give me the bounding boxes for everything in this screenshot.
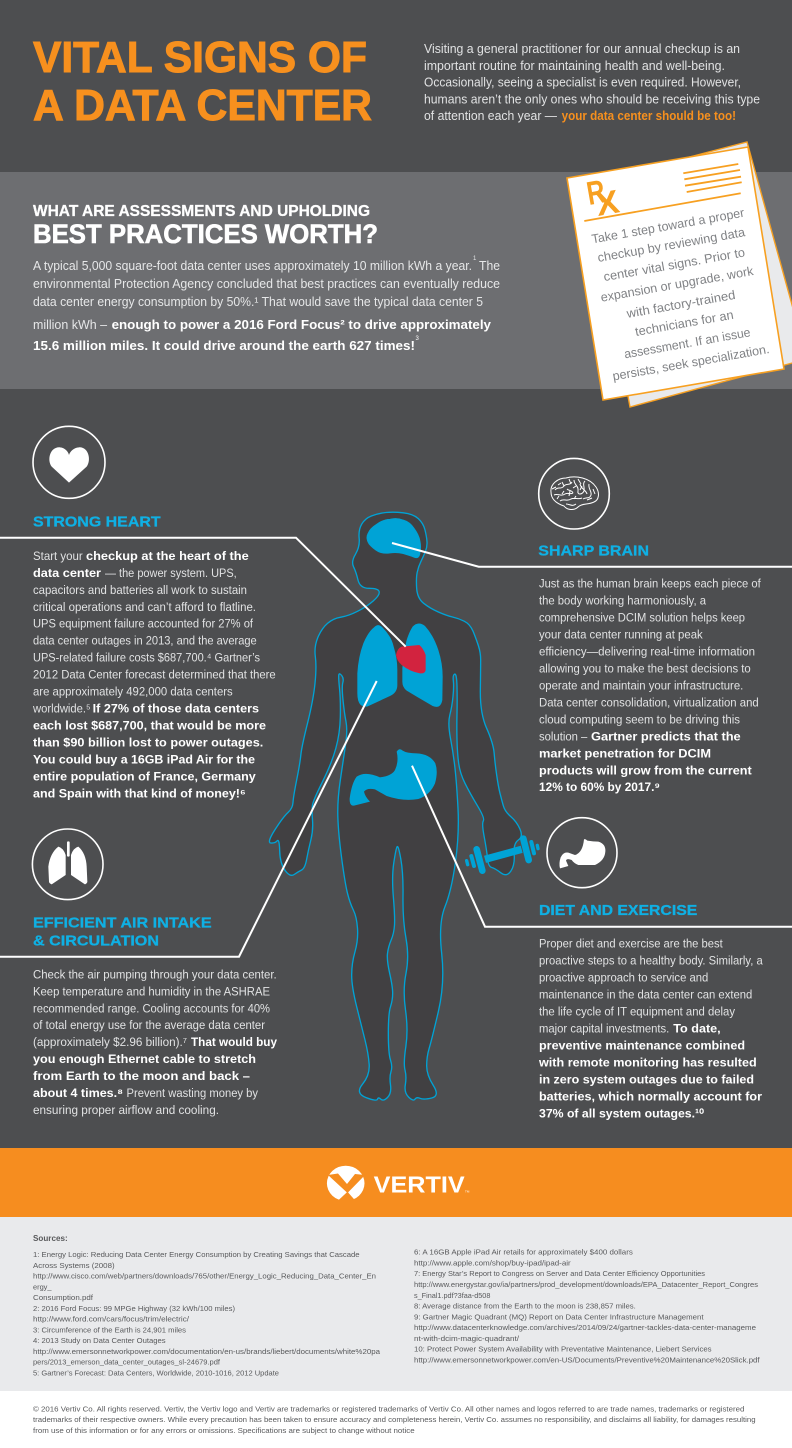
icon: Rx symbol: R: [584, 172, 608, 212]
heading: WHAT ARE ASSESSMENTS AND UPHOLDING: [33, 203, 370, 220]
sources left column: 5: Gartner’s Forecast: Data Centers, Worldwide, 2010-1016, 2012 Update: [33, 1368, 279, 1378]
text: sharp brain: market penetration for DCIM: [539, 746, 711, 760]
text: prescription note: center vital signs. Prior to: [603, 245, 746, 284]
sources right column: 7: Energy Star’s Report to Congress on Server and Data Center Efficiency Opportunities: [414, 1269, 705, 1278]
text: prescription note: technicians for an: [634, 308, 735, 339]
panel: orange logo band: [0, 1148, 792, 1217]
arrow: heart callout line: [0, 538, 406, 647]
arrow: lungs callout line: [0, 681, 377, 957]
sources left column: pers/2013_emerson_data_center_outages_sl-24679.pdf: [33, 1358, 221, 1367]
best practices paragraph: million kWh –: [33, 318, 107, 332]
text: prescription note: assessment. If an issue: [623, 325, 752, 361]
sources right column: 10: Protect Power System Availability with Preventative Maintenance, Liebert Services: [414, 1345, 712, 1354]
title: VITAL SIGNS OF: [33, 33, 367, 82]
icon: Rx symbol: X: [593, 182, 622, 223]
text: diet and exercise: proactive steps to a healthy body. Similarly, a: [539, 954, 763, 968]
heading: sharp brain: SHARP BRAIN: [538, 543, 649, 560]
heading: strong heart: STRONG HEART: [33, 514, 161, 531]
sources left column: http://www.emersonnetworkpower.com/documentation/en-us/brands/liebert/documents/white%20pa: [33, 1347, 381, 1356]
organ: lungs: [357, 623, 443, 707]
sources right column: 6: A 16GB Apple iPad Air retails for approximately $400 dollars: [414, 1248, 633, 1257]
best practices paragraph: enough to power a 2016 Ford Focus² to drive approximately: [112, 317, 492, 332]
text: sharp brain: products will grow from the current: [539, 763, 752, 777]
best practices paragraph: data center energy consumption by 50%.¹ That would save the typical data center 5: [33, 295, 483, 309]
text: sharp brain: efficiency—delivering real-time information: [539, 644, 755, 658]
sources right column: 9: Gartner Magic Quadrant (MQ) Report on Data Center Infrastructure Management: [414, 1312, 704, 1321]
sources right column: nt-with-dcim-magic-quadrant/: [414, 1334, 520, 1343]
heading: efficient air intake and circulation: & CIRCULATION: [33, 933, 159, 950]
text: diet and exercise: maintenance in the data center can extend: [539, 988, 752, 1002]
sources left column: 2: 2016 Ford Focus: 99 MPGe Highway (32 kWh/100 miles): [33, 1304, 235, 1313]
heading: efficient air intake and circulation: EFFICIENT AIR INTAKE: [33, 914, 212, 931]
text: strong heart: are approximately 492,000 data centers: [33, 685, 233, 699]
text: strong heart: — the power system. UPS,: [105, 566, 237, 580]
intro text: Occasionally, seeing a specialist is even required. However,: [424, 76, 741, 90]
intro text: Visiting a general practitioner for our annual checkup is an: [424, 42, 740, 56]
sources left column: Consumption.pdf: [33, 1293, 94, 1302]
heading: efficient air intake and circulation: [33, 914, 212, 950]
text: sharp brain: comprehensive DCIM solution helps keep: [539, 611, 745, 625]
text: air intake: you enough Ethernet cable to stretch: [33, 1052, 256, 1066]
panel: header: [0, 0, 792, 172]
text: sharp brain: 12% to 60% by 2017.⁹: [539, 780, 660, 794]
heading: BEST PRACTICES WORTH?: [33, 219, 378, 249]
text: strong heart: data center outages in 2013, and the average: [33, 634, 257, 648]
heading: sources: Sources:: [33, 1234, 68, 1243]
text: air intake: Keep temperature and humidity in the ASHRAE: [33, 984, 270, 998]
text: strong heart: and Spain with that kind of money!⁶: [33, 786, 246, 800]
sources right column: http://www.emersonnetworkpower.com/en-US/Documents/Preventive%20Maintenance%20Slick.pdf: [414, 1355, 761, 1364]
text: air intake: Prevent wasting money by: [126, 1086, 259, 1100]
text: strong heart: [32, 549, 276, 800]
text: prescription note: expansion or upgrade, work: [600, 264, 755, 305]
sources left column: Across Systems (2008): [33, 1261, 115, 1270]
text: prescription note: persists, seek specialization.: [611, 342, 771, 383]
panel: copyright: [0, 1391, 792, 1448]
text: strong heart: capacitors and batteries all work to sustain: [33, 583, 247, 597]
best practices paragraph: environmental Protection Agency concluded that best practices can eventually reduce: [33, 277, 500, 291]
text: strong heart: critical operations and can’t afford to flatline.: [33, 600, 256, 614]
best practices paragraph: 15.6 million miles. It could drive around the earth 627 times!: [33, 338, 415, 353]
text: diet and exercise: with remote monitoring has resulted: [538, 1056, 757, 1070]
intro text: important routine for maintaining health and well-being.: [424, 59, 725, 73]
prescription lines: [584, 164, 742, 221]
arrow: stomach callout line: [412, 766, 792, 927]
text: sharp brain: Gartner predicts that the: [591, 730, 741, 744]
text: air intake: (approximately $2.96 billion).⁷: [33, 1035, 187, 1049]
text: prescription note: checkup by reviewing data: [597, 225, 746, 265]
best practices paragraph: The: [479, 259, 500, 273]
intro text: [424, 42, 760, 123]
icon: heart: [33, 426, 105, 498]
copyright text: from use of this information or for any errors or omissions. Specifications are subject to change without notice: [33, 1426, 415, 1435]
sources left column: ergy_: [33, 1282, 52, 1291]
copyright text: © 2016 Vertiv Co. All rights reserved. Vertiv, the Vertiv logo and Vertiv are trademarks or registered trademarks of Vertiv Co. All other names and logos referred to are trade names, trademarks or registered: [33, 1404, 744, 1413]
text: diet and exercise: in zero system outages due to failed: [539, 1072, 754, 1086]
icon: stomach: [547, 818, 617, 888]
text: air intake: That would buy: [191, 1035, 277, 1049]
text: sharp brain: operate and maintain your infrastructure.: [539, 678, 743, 692]
sources left column: [33, 1250, 381, 1378]
logo: Vertiv: [327, 1166, 470, 1202]
text: strong heart: each lost $687,700, that would be more: [33, 719, 266, 733]
logo: Vertiv: VERTIV: [374, 1172, 465, 1198]
best practices paragraph: 3: [416, 336, 420, 342]
copyright text: trademarks of their respective owners. While every precaution has been taken to ensure accuracy and completeness herein, Vertiv Co. assumes no responsibility, and disclaims all liability, for damages resulting: [33, 1415, 756, 1424]
icon: dumbbell: [467, 839, 538, 871]
icon: Rx symbol: [584, 172, 622, 223]
logo: Vertiv: TM: [465, 1190, 470, 1194]
text: sharp brain: your data center running at peak: [539, 628, 704, 642]
text: diet and exercise: batteries, which normally account for: [539, 1090, 762, 1104]
sources right column: http://www.apple.com/shop/buy-ipad/ipad-air: [414, 1258, 571, 1268]
text: diet and exercise: proactive approach to service and: [539, 971, 708, 985]
text: strong heart: data center: [33, 566, 101, 580]
sources left column: 1: Energy Logic: Reducing Data Center Energy Consumption by Creating Savings that Cascade: [33, 1250, 360, 1259]
text: sharp brain: allowing you to make the best decisions to: [539, 662, 751, 676]
text: sharp brain: the body working harmoniously, a: [539, 594, 706, 608]
text: sharp brain: Data center consolidation, virtualization and: [539, 696, 759, 710]
sources right column: [414, 1248, 761, 1364]
text: diet and exercise: Proper diet and exercise are the best: [539, 937, 723, 951]
organ: brain: [367, 518, 421, 558]
sources right column: 8: Average distance from the Earth to the moon is 238,857 miles.: [414, 1302, 636, 1310]
text: sharp brain: cloud computing seem to be driving this: [539, 712, 740, 726]
sources right column: http://www.energystar.gov/ia/partners/prod_development/downloads/EPA_Datacenter_Report_Congres: [414, 1280, 758, 1289]
text: strong heart: UPS-related failure costs $687,700.⁴ Gartner’s: [33, 651, 260, 665]
panel: vital signs: [0, 389, 792, 1148]
intro text: humans aren’t the only ones who should be receiving this type: [424, 92, 760, 106]
text: diet and exercise: [538, 937, 763, 1120]
text: diet and exercise: preventive maintenance combined: [539, 1038, 745, 1052]
text: strong heart: than $90 billion lost to power outages.: [33, 736, 263, 750]
text: strong heart: Start your: [33, 549, 83, 563]
best practices paragraph: A typical 5,000 square-foot data center uses approximately 10 million kWh a year.: [33, 259, 472, 273]
text: air intake: of total energy use for the average data center: [33, 1018, 265, 1032]
text: air intake: about 4 times.⁸: [33, 1086, 123, 1100]
text: air intake: from Earth to the moon and back –: [33, 1069, 250, 1083]
text: diet and exercise: major capital investments.: [539, 1022, 669, 1036]
text: prescription note: [591, 206, 771, 383]
text: air intake: recommended range. Cooling accounts for 40%: [33, 1002, 270, 1016]
sources left column: http://www.cisco.com/web/partners/downloads/765/other/Energy_Logic_Reducing_Data_Center_En: [33, 1272, 376, 1280]
sources left column: 4: 2013 Study on Data Center Outages: [33, 1336, 166, 1345]
text: sharp brain: solution –: [539, 730, 588, 744]
intro text: of attention each year —: [424, 109, 557, 123]
text: strong heart: entire population of France, Germany: [33, 769, 256, 783]
text: diet and exercise: 37% of all system outages.¹⁰: [539, 1106, 704, 1120]
sources left column: http://www.ford.com/cars/focus/trim/electric/: [33, 1315, 190, 1324]
intro text: your data center should be too!: [562, 109, 736, 123]
text: air intake: ensuring proper airflow and cooling.: [33, 1103, 219, 1117]
text: sharp brain: Just as the human brain keeps each piece of: [539, 577, 761, 591]
arrow: brain callout line: [392, 543, 792, 567]
text: air intake: Check the air pumping through your data center.: [33, 968, 277, 982]
heading: [33, 203, 378, 249]
title: A DATA CENTER: [33, 81, 372, 130]
best practices paragraph: [33, 256, 500, 353]
best practices paragraph: 1: [473, 256, 477, 262]
text: strong heart: UPS equipment failure accounted for 27% of: [33, 617, 254, 631]
text: strong heart: 2012 Data Center forecast determined that there: [33, 668, 276, 682]
sources left column: 3: Circumference of the Earth is 24,901 miles: [33, 1325, 186, 1334]
text: diet and exercise: To date,: [673, 1022, 721, 1036]
text: strong heart: You could buy a 16GB iPad Air for the: [33, 752, 255, 766]
text: strong heart: If 27% of those data centers: [93, 702, 259, 716]
organ: stomach: [350, 749, 437, 806]
text: strong heart: checkup at the heart of the: [86, 549, 249, 563]
text: air intake: [33, 968, 277, 1117]
text: prescription note: with factory-trained: [625, 288, 736, 321]
text: sharp brain: [539, 577, 761, 794]
sources right column: http://www.datacenterknowledge.com/archives/2014/09/24/gartner-tackles-data-center-manageme: [414, 1323, 756, 1332]
panel: Rx prescription note: [567, 142, 792, 407]
icon: brain: [539, 458, 609, 529]
sources right column: s_Final1.pdf?3faa-d508: [414, 1291, 490, 1300]
text: diet and exercise: the life cycle of IT equipment and delay: [539, 1005, 736, 1019]
human body figure: [269, 512, 538, 1100]
text: strong heart: worldwide.⁵: [32, 702, 91, 716]
panel: sources: [0, 1217, 792, 1391]
title: [33, 33, 372, 130]
heading: diet and exercise: DIET AND EXERCISE: [539, 902, 697, 919]
text: prescription note: Take 1 step toward a proper: [591, 206, 745, 246]
panel: best practices: [0, 172, 792, 389]
icon: lungs: [32, 829, 103, 900]
organ: heart: [396, 645, 426, 673]
copyright text: [33, 1404, 756, 1435]
